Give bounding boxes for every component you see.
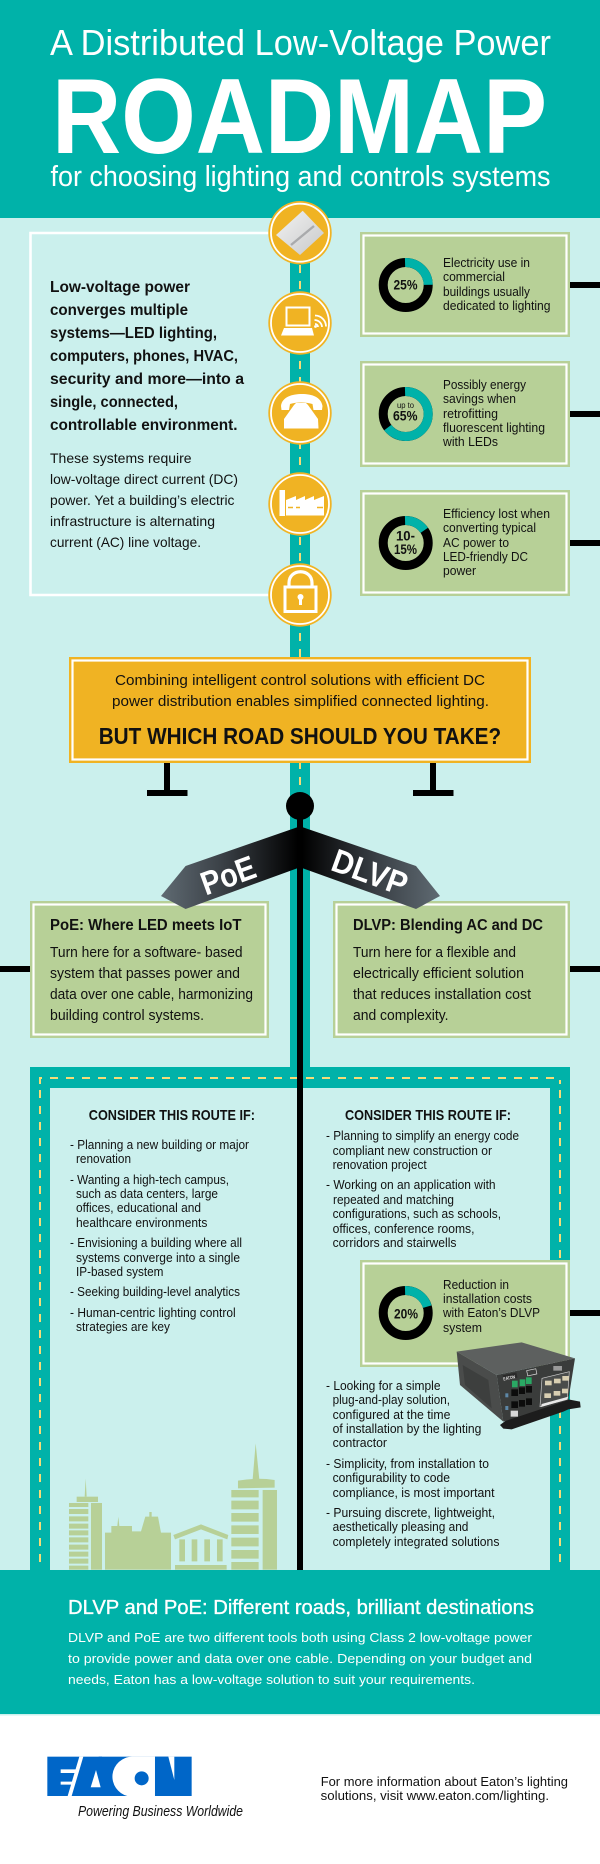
connector lines to the right edge — [570, 282, 600, 546]
intro bold paragraph: computers, phones, HVAC, — [50, 348, 238, 365]
stat text — [443, 506, 550, 578]
donut chart: up to 65% — [383, 392, 428, 436]
stat text: buildings usually — [443, 284, 530, 299]
route list: - Working on an application with — [326, 1177, 496, 1192]
route list: renovation project — [333, 1157, 427, 1172]
panel: DLVP route conditions — [326, 1107, 519, 1549]
panel: DLVP — [333, 901, 570, 1038]
road: route frame — [30, 1067, 570, 1570]
more information text — [321, 1774, 568, 1803]
intro bold paragraph: security and more—into a — [50, 371, 244, 388]
summary paragraph: DLVP and PoE are two different tools both using Class 2 low-voltage power — [68, 1630, 533, 1645]
street sign: DLVP — [302, 827, 440, 909]
stat text: retrofitting — [443, 406, 498, 421]
route list: offices, conference rooms, — [333, 1221, 474, 1236]
product: Eaton DLVP device: EATON — [503, 1374, 516, 1382]
donut chart: up to 65%: 65% — [393, 408, 418, 424]
route list: - Human-centric lighting control — [70, 1305, 236, 1320]
PoE body: data over one cable, harmonizing — [50, 987, 253, 1003]
route list: - Looking for a simple — [326, 1378, 440, 1393]
stat text: AC power to — [443, 535, 509, 550]
route list — [70, 1137, 250, 1334]
route list: repeated and matching — [333, 1192, 454, 1207]
route list: - Simplicity, from installation to — [326, 1456, 489, 1471]
DLVP body: that reduces installation cost — [353, 987, 531, 1003]
header band — [0, 0, 600, 218]
signpost pole — [286, 792, 314, 1570]
route list: compliance, is most important — [333, 1485, 495, 1500]
donut chart: 10-15% — [383, 520, 428, 566]
donut chart: 25% — [383, 262, 428, 308]
icon: factory — [268, 472, 332, 536]
stat text: with LEDs — [442, 434, 498, 449]
intro bold paragraph: controllable environment. — [50, 417, 238, 434]
route list: configured at the time — [333, 1407, 450, 1422]
product: Eaton DLVP device — [457, 1342, 581, 1429]
stat text: with Eaton’s DLVP — [442, 1305, 540, 1320]
DLVP body: and complexity. — [353, 1008, 448, 1024]
stat text: Reduction in — [443, 1277, 509, 1292]
subtitle: for choosing lighting and controls systems — [50, 161, 550, 193]
logo tagline: Powering Business Worldwide — [78, 1803, 243, 1820]
sign post right — [413, 763, 454, 796]
donut chart: 10-15%: 15% — [394, 542, 417, 557]
stat text — [442, 377, 545, 449]
donut chart: 10-15%: 10- — [396, 529, 415, 544]
right tower — [231, 1443, 277, 1570]
intro regular paragraph: current (AC) line voltage. — [50, 534, 201, 550]
PoE body: building control systems. — [50, 1008, 204, 1024]
PoE body: Turn here for a software- based — [50, 945, 243, 961]
stat text: savings when — [443, 391, 516, 406]
stat text: power — [443, 563, 477, 578]
icon: padlock — [268, 563, 332, 627]
illustration: city skyline — [69, 1443, 277, 1570]
route list: compliant new construction or — [333, 1143, 493, 1158]
stat text: Electricity use in — [443, 255, 530, 270]
route list: corridors and stairwells — [333, 1235, 456, 1250]
stat text: system — [443, 1320, 482, 1335]
panel: stat 20% — [360, 1260, 570, 1367]
icon: light panel — [268, 201, 332, 264]
route list: - Planning a new building or major — [70, 1137, 250, 1152]
intro bold paragraph: systems—LED lighting, — [50, 325, 217, 342]
road sign: which road callout: power distribution enables simplified connected lighting. — [112, 694, 489, 710]
summary heading: DLVP and PoE: Different roads, brilliant destinations — [68, 1597, 534, 1619]
route list: configurability to code — [333, 1470, 450, 1485]
panel: intro text outline — [30, 233, 272, 595]
route list: such as data centers, large — [76, 1186, 218, 1201]
road: vertical centre — [290, 217, 310, 1068]
intro bold paragraph: single, connected, — [50, 394, 178, 411]
PoE body: system that passes power and — [50, 966, 240, 982]
route list — [326, 1128, 519, 1549]
icon: laptop with wifi — [268, 291, 332, 355]
route list: - Pursuing discrete, lightweight, — [326, 1505, 495, 1520]
connector: 20% stat — [570, 1310, 600, 1316]
stat text: commercial — [443, 269, 505, 284]
route list: - Wanting a high-tech campus, — [70, 1172, 229, 1187]
route list: healthcare environments — [76, 1215, 207, 1230]
connector: PoE and DLVP panels — [0, 966, 600, 972]
DLVP body: Turn here for a flexible and — [353, 945, 516, 961]
route list: offices, educational and — [76, 1200, 201, 1215]
PoE heading: PoE: Where LED meets IoT — [50, 917, 242, 934]
panel: stat 10-15% — [360, 490, 570, 596]
summary paragraph: needs, Eaton has a low-voltage solution to suit your requirements. — [68, 1672, 475, 1687]
stat text — [443, 255, 550, 313]
route list: IP-based system — [76, 1264, 163, 1279]
donut chart: up to 65%: up to — [397, 401, 415, 410]
title line: A Distributed Low-Voltage Power — [50, 22, 551, 63]
stat text: fluorescent lighting — [443, 420, 545, 435]
intro bold paragraph: Low-voltage power — [50, 279, 190, 296]
stat text: LED-friendly DC — [443, 549, 528, 564]
icon: telephone — [268, 381, 332, 445]
donut chart: 20%: 20% — [394, 1307, 418, 1322]
route list: completely integrated solutions — [333, 1534, 499, 1549]
route list: systems converge into a single — [76, 1250, 240, 1265]
intro regular paragraph: These systems require — [50, 450, 192, 466]
route list: strategies are key — [76, 1319, 171, 1334]
Eaton logo — [47, 1757, 192, 1796]
route list: - Planning to simplify an energy code — [326, 1128, 519, 1143]
stat text: installation costs — [443, 1291, 532, 1306]
route list: renovation — [76, 1151, 131, 1166]
more information text: For more information about Eaton’s lighting — [321, 1774, 568, 1789]
street sign: PoE — [161, 827, 298, 909]
title: ROADMAP: ROADMAP — [52, 56, 547, 176]
footer band: summary — [0, 1570, 600, 1716]
left tower — [69, 1478, 102, 1570]
street sign: PoE: PoE — [195, 848, 261, 902]
DLVP heading: DLVP: Blending AC and DC — [353, 917, 543, 934]
panel: stat 25% — [360, 232, 570, 337]
route list: configurations, such as schools, — [333, 1206, 501, 1221]
stat text: Possibly energy — [443, 377, 526, 392]
panel: PoE — [30, 901, 269, 1038]
summary paragraph — [68, 1630, 533, 1687]
road sign: which road callout — [69, 657, 531, 796]
DLVP body: electrically efficient solution — [353, 966, 524, 982]
stat text: Efficiency lost when — [443, 506, 550, 521]
middle block — [105, 1512, 171, 1570]
stat text — [442, 1277, 540, 1335]
street sign: DLVP: DLVP — [327, 841, 413, 903]
intro bold paragraph — [50, 279, 244, 434]
question heading: BUT WHICH ROAD SHOULD YOU TAKE? — [99, 723, 501, 749]
road sign: which road callout: Combining intelligent control solutions with efficient DC — [115, 673, 485, 689]
PoE body — [50, 945, 253, 1024]
panel: PoE route conditions — [70, 1107, 255, 1334]
intro regular paragraph — [50, 450, 238, 550]
stat text: converting typical — [443, 520, 536, 535]
donut chart: 25%: 25% — [394, 278, 418, 292]
stat text: dedicated to lighting — [443, 298, 550, 313]
route list: of installation by the lighting — [333, 1421, 481, 1436]
intro regular paragraph: low-voltage direct current (DC) — [50, 471, 238, 487]
summary paragraph: to provide power and data over one cable. Depending on your budget and — [68, 1651, 532, 1666]
DLVP body — [353, 945, 531, 1024]
route list: aesthetically pleasing and — [333, 1519, 468, 1534]
donut chart: 20% — [383, 1290, 428, 1336]
route list: contractor — [333, 1435, 388, 1450]
temple — [173, 1524, 228, 1570]
route list: - Envisioning a building where all — [70, 1235, 242, 1250]
panel: stat up to 65% — [360, 361, 570, 467]
heading: CONSIDER THIS ROUTE IF: — [345, 1107, 511, 1124]
white footer — [0, 1716, 600, 1864]
intro regular paragraph: infrastructure is alternating — [50, 513, 215, 529]
intro bold paragraph: converges multiple — [50, 302, 188, 319]
sign post left — [147, 763, 188, 796]
route list: plug-and-play solution, — [333, 1392, 450, 1407]
more information text: solutions, visit www.eaton.com/lighting. — [321, 1788, 549, 1803]
intro regular paragraph: power. Yet a building’s electric — [50, 492, 234, 508]
heading: CONSIDER THIS ROUTE IF: — [89, 1107, 255, 1124]
route list: - Seeking building-level analytics — [70, 1284, 240, 1299]
